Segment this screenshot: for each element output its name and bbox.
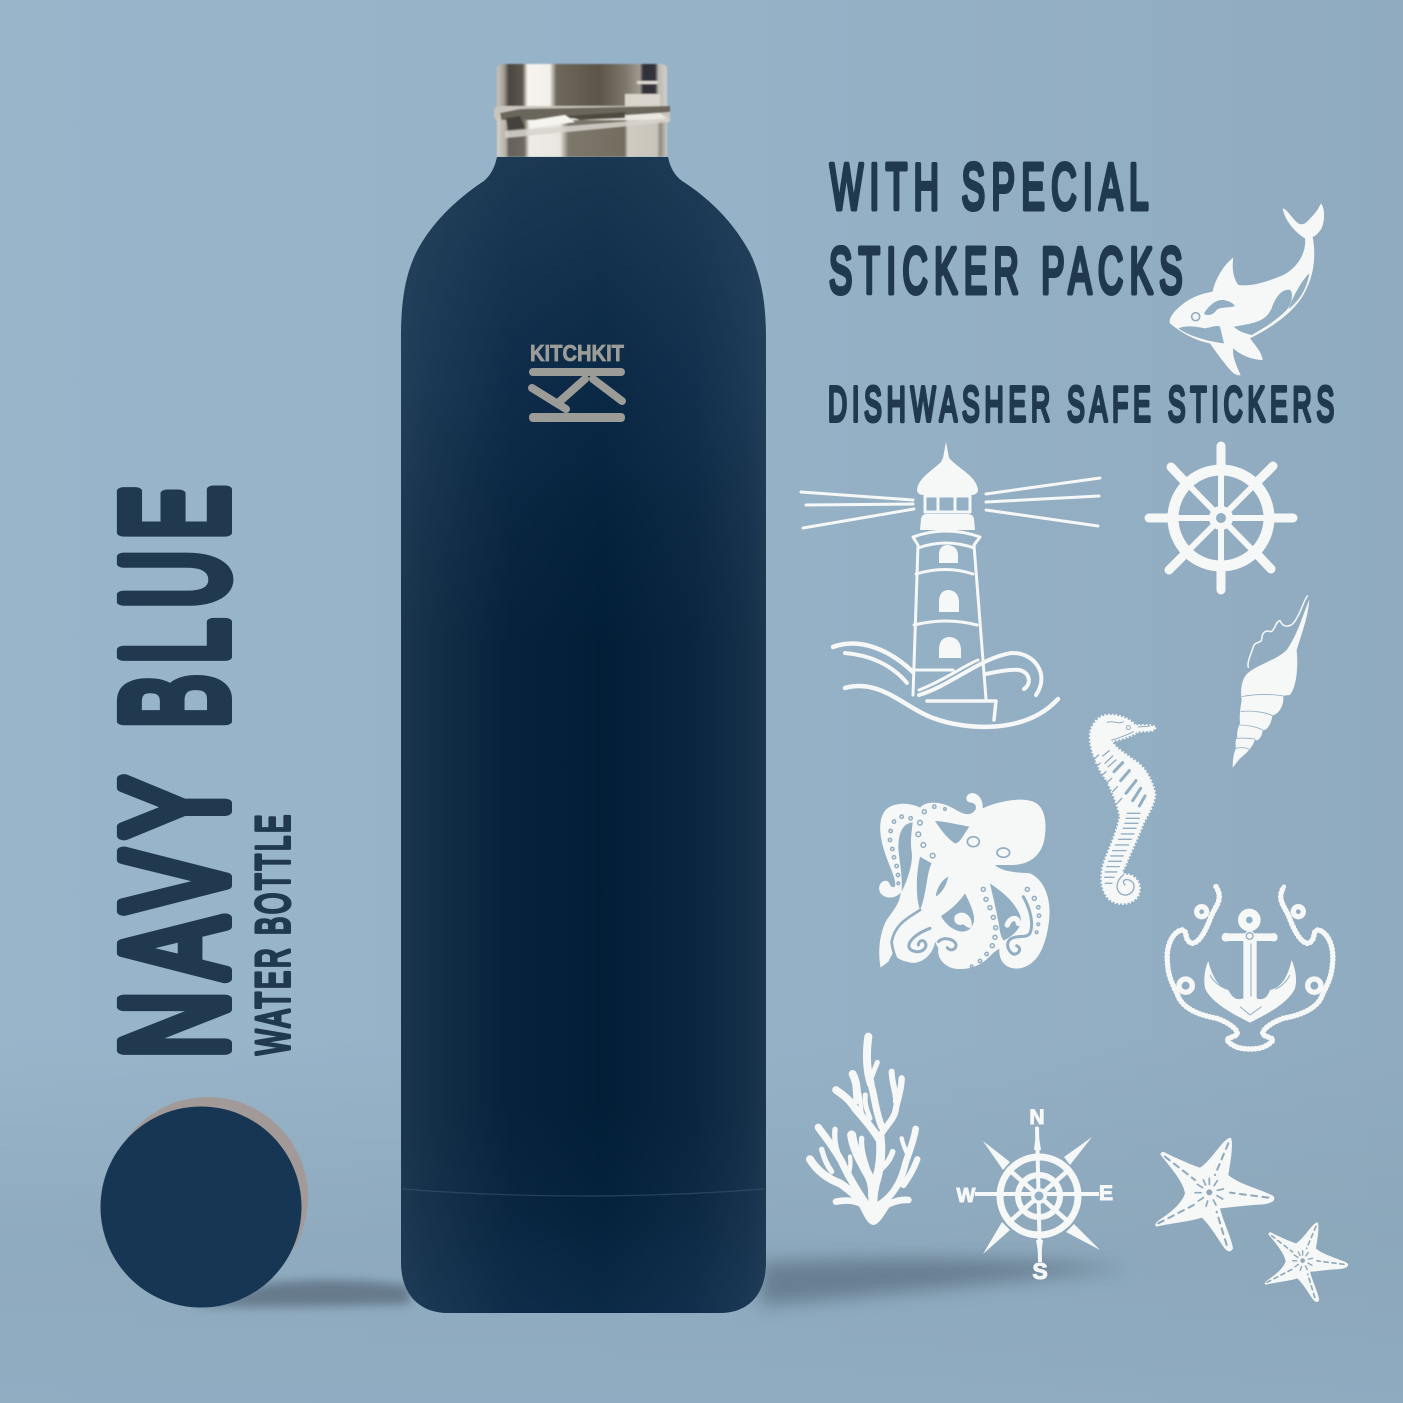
logo: KITCHKIT (529, 340, 625, 422)
bottle (401, 64, 766, 1313)
icon: orca (1170, 203, 1324, 375)
icon: lighthouse (801, 442, 1100, 727)
icon: octopus (879, 793, 1050, 969)
title: NAVY BLUE: BLUE (93, 475, 257, 728)
icon: coral (810, 1037, 917, 1225)
rope (1167, 887, 1333, 1049)
light rays (801, 478, 1100, 528)
logo: KITCHKIT: KITCHKIT (530, 340, 624, 366)
bottle cap (100, 1097, 308, 1308)
icon: compass (957, 1106, 1113, 1284)
letter E: E (1099, 1182, 1113, 1205)
letter W: W (957, 1185, 976, 1207)
icon: ship wheel (1149, 446, 1293, 590)
icon: large starfish (1155, 1138, 1274, 1251)
icon: anchor with rope (1167, 887, 1333, 1049)
letter S: S (1032, 1258, 1048, 1284)
letter N: N (1029, 1106, 1045, 1129)
floor shadows (190, 1258, 1130, 1307)
anchor (1204, 909, 1296, 1023)
bottle body (401, 157, 766, 1313)
subtitle: WATER BOTTLE: WATER BOTTLE (246, 812, 299, 1055)
title: NAVY BLUE: NAVY (93, 764, 257, 1058)
icon: small starfish (1265, 1222, 1348, 1302)
bottle neck: steel (494, 64, 670, 157)
icon: seahorse (1090, 715, 1155, 904)
icon: sea shell (1233, 596, 1309, 768)
